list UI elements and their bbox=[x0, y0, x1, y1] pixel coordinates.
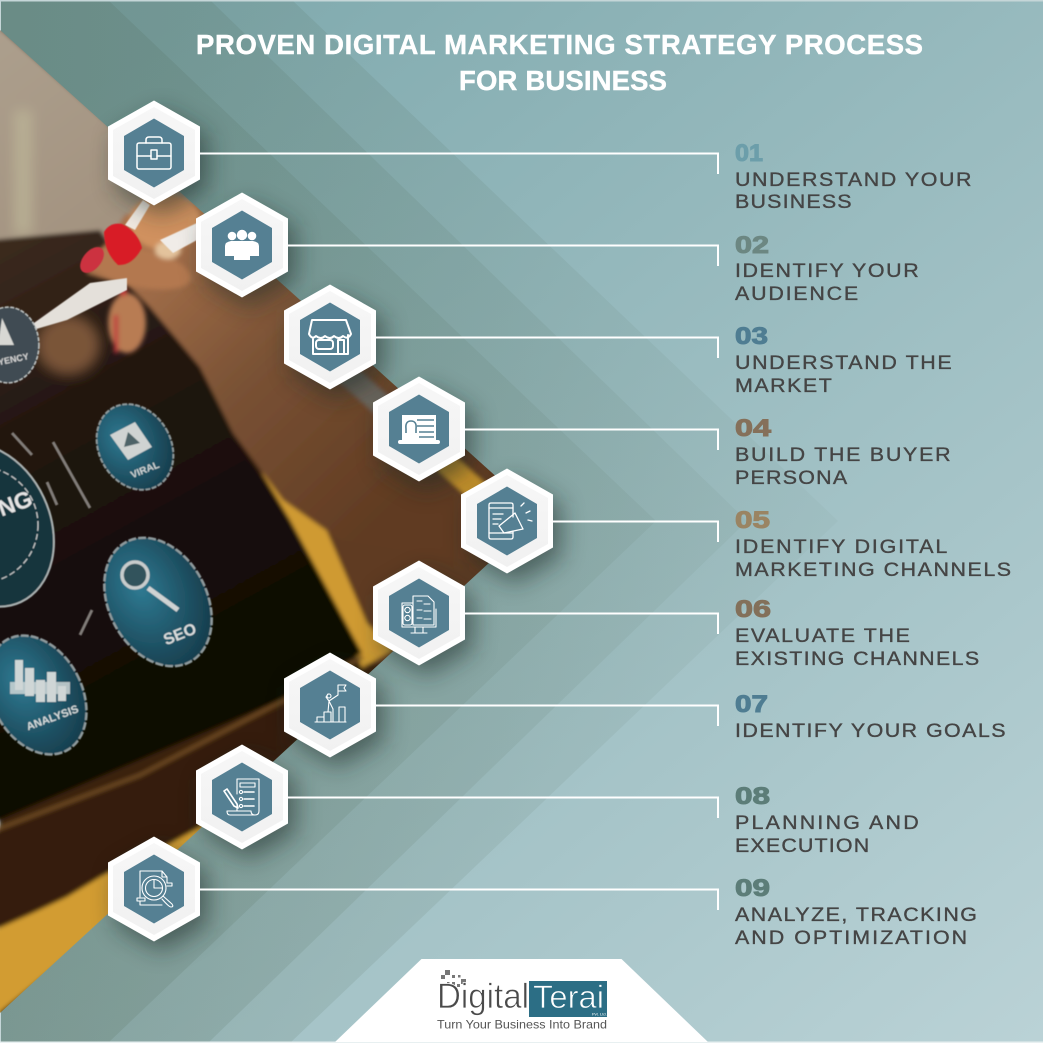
step 03 bbox=[284, 284, 952, 397]
label 08: EXECUTION bbox=[735, 835, 869, 857]
tablet buttons: ANALYSIS bbox=[25, 703, 80, 733]
logo wordmark: Digital: Digital bbox=[437, 977, 529, 1016]
step 01 bbox=[108, 100, 972, 213]
label 04: PERSONA bbox=[735, 467, 848, 489]
label 09 bbox=[735, 904, 977, 949]
hand skin bbox=[85, 194, 201, 353]
connector 04 bbox=[465, 430, 718, 450]
label 03: UNDERSTAND THE bbox=[735, 352, 952, 374]
label 01: UNDERSTAND YOUR bbox=[735, 169, 972, 191]
label 09: ANALYZE, TRACKING bbox=[735, 904, 977, 926]
hexagon 09: report analysis icon bbox=[108, 836, 200, 942]
label 01: BUSINESS bbox=[735, 191, 852, 213]
label 02: IDENTIFY YOUR bbox=[735, 260, 919, 282]
hexagon shadows bbox=[116, 110, 561, 952]
pen bbox=[34, 200, 196, 330]
tablet buttons bbox=[0, 306, 214, 756]
title bbox=[196, 29, 923, 96]
photo: hand writing on a tablet bbox=[0, 30, 495, 1013]
connector 05 bbox=[553, 522, 718, 542]
arm and hand bbox=[84, 204, 495, 531]
step 04 bbox=[373, 376, 951, 489]
step 02 bbox=[196, 192, 919, 305]
hexagon 03: shop icon bbox=[284, 284, 376, 390]
hexagon 01: briefcase icon bbox=[108, 100, 200, 206]
label 07: IDENTIFY YOUR GOALS bbox=[735, 720, 1006, 742]
number 08: 08 bbox=[735, 783, 770, 810]
logo panel bbox=[335, 959, 708, 1042]
label 01 bbox=[735, 169, 972, 213]
nails bbox=[80, 223, 142, 274]
number 05: 05 bbox=[735, 507, 770, 534]
step 05 bbox=[461, 468, 1011, 581]
hexagon 05: phone and megaphone icon bbox=[461, 468, 553, 574]
step 07 bbox=[284, 652, 1006, 758]
connector 07 bbox=[376, 706, 718, 726]
logo box: Terai: Pvt. Ltd. bbox=[592, 1012, 607, 1016]
connector 03 bbox=[376, 338, 718, 358]
hexagon 02: people icon bbox=[196, 192, 288, 298]
connector 09 bbox=[200, 890, 718, 910]
label 08 bbox=[735, 812, 919, 857]
hexagon 06: checklist monitor icon bbox=[373, 560, 465, 666]
step 06 bbox=[373, 560, 979, 670]
tablet buttons: SEO bbox=[161, 621, 199, 649]
label 04 bbox=[735, 444, 951, 489]
logo tagline: Turn Your Business Into Brand bbox=[437, 1018, 607, 1032]
connector 02 bbox=[288, 246, 718, 266]
title: FOR BUSINESS bbox=[459, 65, 667, 96]
lower table bbox=[258, 470, 488, 667]
label 08: PLANNING AND bbox=[735, 812, 919, 834]
tablet buttons: VIRAL bbox=[129, 460, 161, 481]
label 09: AND OPTIMIZATION bbox=[735, 927, 967, 949]
logo box: Terai: Terai bbox=[533, 979, 604, 1015]
connector 08 bbox=[288, 798, 718, 818]
number 06: 06 bbox=[735, 596, 771, 623]
hexagon 04: profile laptop icon bbox=[373, 376, 465, 482]
hexagon 08: plan and pencil icon bbox=[196, 744, 288, 850]
hexagon 07: climbing with flag icon bbox=[284, 652, 376, 758]
step 09 bbox=[108, 836, 977, 949]
label 06: EVALUATE THE bbox=[735, 625, 910, 647]
number 09: 09 bbox=[735, 875, 770, 902]
number 04: 04 bbox=[735, 415, 772, 442]
label 06 bbox=[735, 625, 979, 670]
number 03: 03 bbox=[735, 323, 768, 350]
label 02 bbox=[735, 260, 919, 305]
connector 06 bbox=[465, 614, 718, 634]
label 03 bbox=[735, 352, 952, 397]
label 03: MARKET bbox=[735, 375, 832, 397]
title: PROVEN DIGITAL MARKETING STRATEGY PROCESS bbox=[196, 29, 923, 60]
tablet bbox=[0, 230, 362, 824]
step 08 bbox=[196, 744, 919, 857]
label 05: IDENTIFY DIGITAL bbox=[735, 536, 947, 558]
number 07: 07 bbox=[735, 691, 768, 718]
label 02: AUDIENCE bbox=[735, 283, 858, 305]
label 05 bbox=[735, 536, 1011, 581]
logo pixel dots bbox=[441, 970, 466, 987]
label 05: MARKETING CHANNELS bbox=[735, 559, 1011, 581]
label 04: BUILD THE BUYER bbox=[735, 444, 951, 466]
connector 01 bbox=[200, 154, 718, 174]
label 06: EXISTING CHANNELS bbox=[735, 648, 979, 670]
number 02: 02 bbox=[735, 232, 769, 259]
number 01: 01 bbox=[735, 140, 763, 167]
